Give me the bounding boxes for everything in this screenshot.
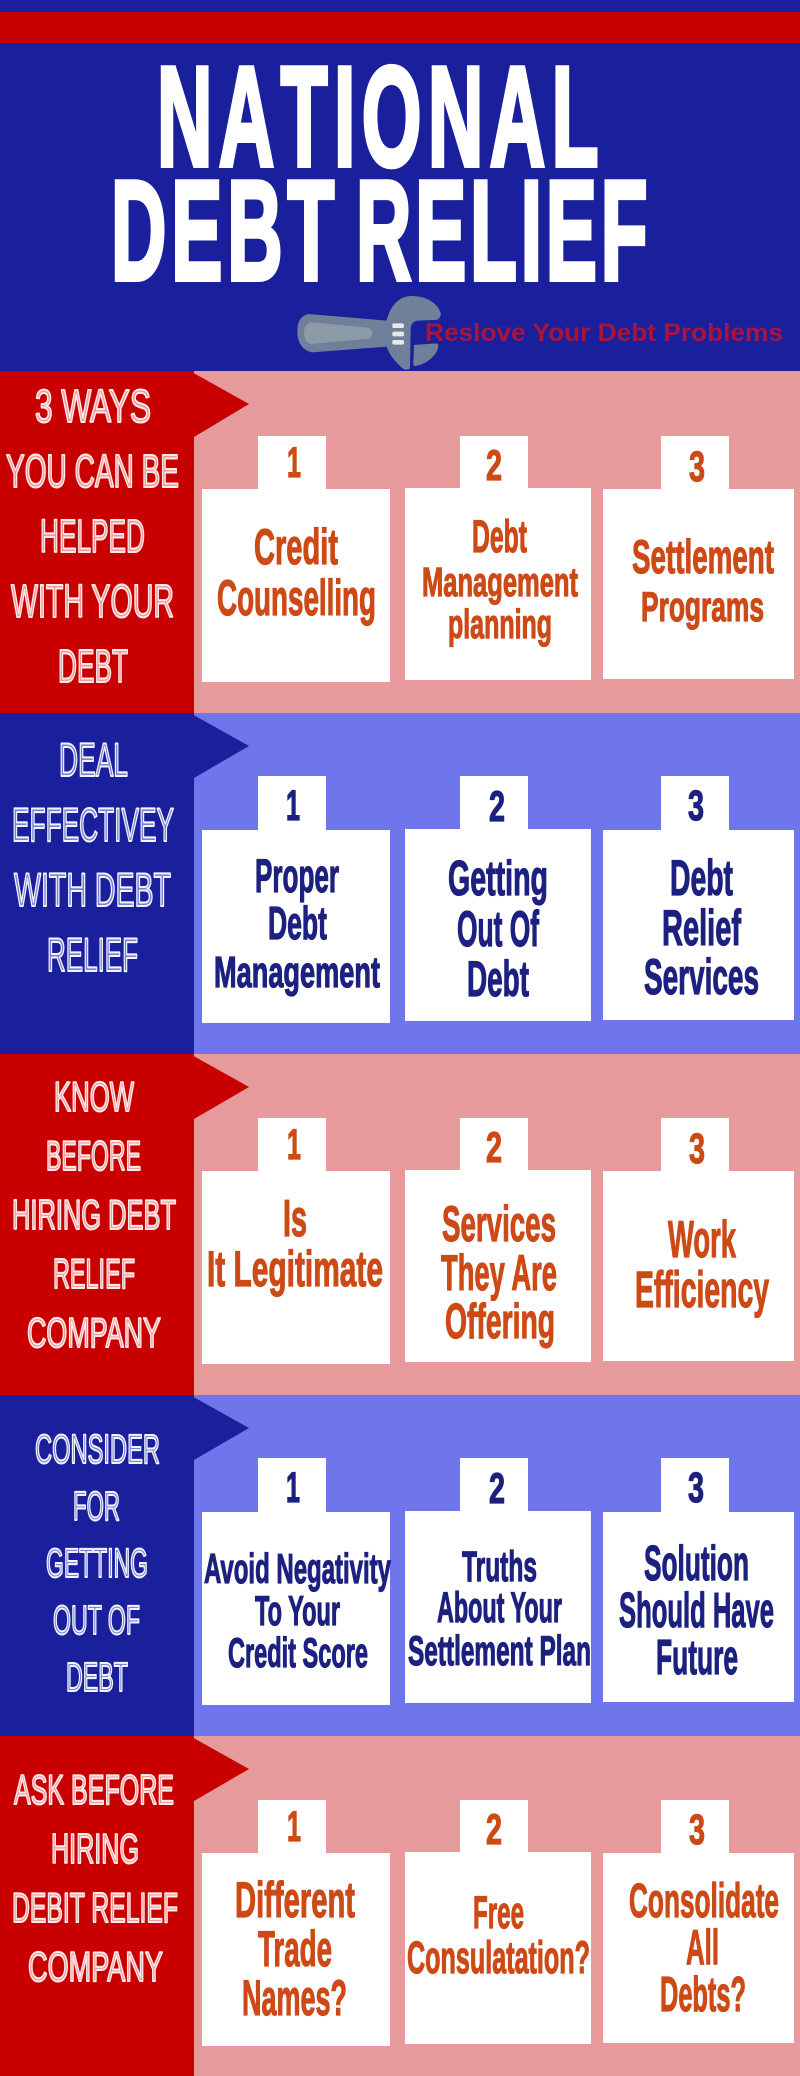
card 2: Services — [442, 1196, 556, 1252]
arrow — [190, 1395, 249, 1460]
section label: DEBT — [66, 1654, 128, 1700]
section label — [35, 1426, 160, 1700]
card 2: Getting — [448, 852, 548, 906]
card 2: Management — [422, 559, 578, 605]
card 1 — [202, 1458, 391, 1705]
card 2: 2 — [486, 1124, 502, 1172]
card 2 — [405, 776, 591, 1021]
card 3: Relief — [662, 900, 741, 956]
card 2: About Your — [437, 1584, 562, 1632]
card 2: 2 — [489, 783, 505, 831]
card 1: To Your — [255, 1587, 340, 1634]
section label — [12, 1073, 176, 1356]
section label — [6, 380, 179, 692]
section label: DEBT — [58, 640, 128, 692]
section label: RELIEF — [53, 1250, 135, 1297]
card 3 — [603, 436, 794, 679]
card 3 — [603, 1118, 794, 1361]
card 3: 3 — [689, 443, 705, 491]
section label: 3 WAYS — [35, 380, 151, 432]
card 2 — [405, 436, 591, 680]
card 1: Management — [214, 948, 380, 997]
section label: YOU CAN BE — [6, 445, 179, 497]
card 3: 3 — [688, 782, 704, 830]
card 1 — [202, 1800, 390, 2046]
icon: wrench — [297, 296, 441, 370]
section label: RELIEF — [47, 928, 138, 981]
top red band — [0, 12, 800, 43]
card 1 — [202, 436, 390, 682]
section label: HELPED — [40, 510, 145, 562]
card 1: Avoid Negativity — [204, 1545, 391, 1592]
section label: DEBIT RELIEF — [12, 1884, 178, 1931]
card 1: 1 — [287, 439, 301, 487]
title — [111, 39, 651, 311]
card 1: Debt — [268, 897, 327, 949]
card 3: 3 — [688, 1464, 704, 1512]
card 3: 3 — [689, 1125, 705, 1173]
card 1: 1 — [287, 1121, 301, 1169]
card 2: Consulatation? — [407, 1932, 590, 1983]
card 2: 2 — [489, 1465, 505, 1513]
card 1: Proper — [255, 849, 339, 902]
tagline: Reslove Your Debt Problems — [425, 319, 783, 347]
card 2: Out Of — [457, 901, 539, 957]
panel: ask before hiring debit relief company — [0, 1736, 800, 2076]
arrow — [190, 1736, 249, 1801]
section label: WITH YOUR — [11, 575, 174, 627]
card 2: Debt — [467, 951, 529, 1007]
section label: WITH DEBT — [14, 863, 171, 916]
card 2: Settlement Plan — [408, 1627, 591, 1674]
card 3 — [603, 776, 794, 1020]
card 1: Different — [235, 1872, 355, 1928]
section label: GETTING — [46, 1540, 148, 1586]
arrow — [190, 1054, 249, 1119]
section label: HIRING — [51, 1825, 139, 1872]
card 1 — [202, 1118, 390, 1364]
panel: know before hiring debt relief company — [0, 1054, 800, 1395]
card 1: Credit — [254, 519, 338, 575]
title: NATIONAL — [157, 39, 605, 197]
card 1: Credit Score — [228, 1629, 368, 1676]
card 1: 1 — [286, 782, 300, 830]
section label: DEAL — [59, 733, 128, 786]
section label: COMPANY — [27, 1309, 161, 1356]
card 2 — [405, 1458, 591, 1703]
card 3: All — [686, 1921, 719, 1975]
card 3: Work — [668, 1211, 736, 1269]
card 2: 2 — [486, 1806, 502, 1854]
panel: deal effectively with debt relief — [0, 713, 800, 1054]
section label: EFFECTIVEY — [12, 798, 174, 851]
card 1: 1 — [286, 1464, 300, 1512]
card 1: 1 — [287, 1803, 301, 1851]
section label: ASK BEFORE — [14, 1766, 174, 1813]
card 2: planning — [448, 601, 552, 647]
card 3: 3 — [689, 1806, 705, 1854]
card 2: Free — [473, 1887, 524, 1938]
header panel — [0, 0, 800, 371]
card 1: Trade — [258, 1921, 332, 1977]
card 2: Debt — [472, 511, 527, 562]
title: DEBT — [111, 153, 339, 311]
card 2: 2 — [486, 442, 502, 490]
card 2 — [405, 1800, 591, 2044]
card 1: Is — [283, 1190, 307, 1248]
section label: BEFORE — [46, 1132, 141, 1179]
card 1 — [202, 776, 390, 1023]
title: RELIEF — [356, 153, 651, 311]
card 3: Debt — [670, 850, 733, 906]
card 2: They Are — [441, 1245, 557, 1301]
section label: OUT OF — [53, 1597, 140, 1643]
arrow — [190, 713, 249, 778]
section label: COMPANY — [28, 1943, 163, 1990]
card 1: It Legitimate — [207, 1241, 383, 1297]
card 1: Counselling — [217, 570, 376, 626]
card 1: Names? — [242, 1970, 347, 2026]
section label — [12, 1766, 178, 1990]
panel: 3 ways you can be helped — [0, 371, 800, 713]
section label: KNOW — [54, 1073, 134, 1120]
panel: consider for getting out of debt — [0, 1395, 800, 1736]
section label: HIRING DEBT — [12, 1191, 176, 1238]
arrow — [190, 371, 249, 437]
card 3 — [603, 1458, 794, 1702]
card 2: Truths — [462, 1543, 537, 1591]
section label: CONSIDER — [35, 1426, 160, 1472]
section label — [12, 733, 174, 981]
card 2 — [405, 1118, 591, 1362]
card 3 — [603, 1800, 794, 2043]
card 2: Offering — [445, 1295, 555, 1349]
section label: FOR — [73, 1483, 120, 1529]
